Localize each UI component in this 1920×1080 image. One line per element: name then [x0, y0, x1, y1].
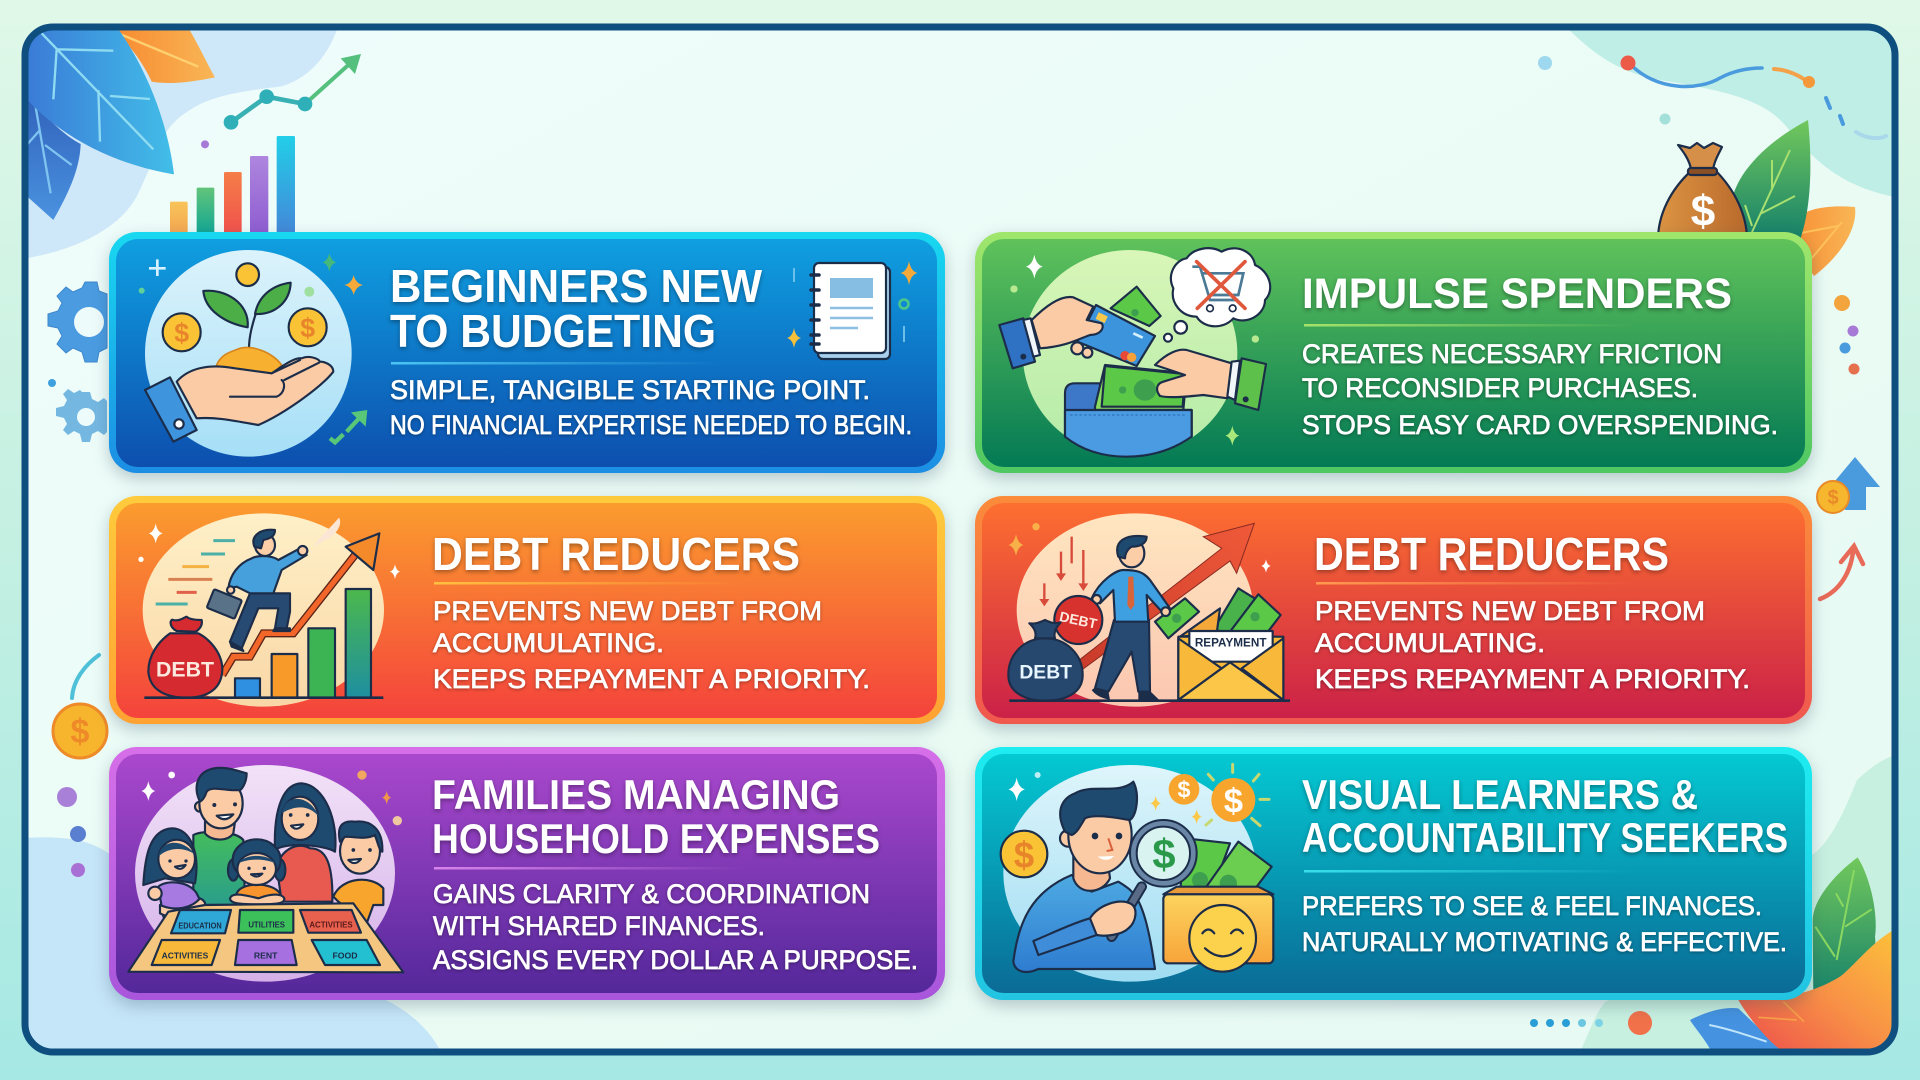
description: STOPS EASY CARD OVERSPENDING.	[1302, 410, 1778, 440]
divider	[434, 582, 744, 584]
heading: FAMILIES MANAGING	[432, 771, 840, 818]
illustration: man with magnifier and money: $	[1152, 830, 1176, 877]
illustration: man with magnifier and money: $	[1014, 834, 1034, 875]
heading	[1302, 771, 1788, 861]
bar chart	[170, 136, 295, 235]
divider	[434, 867, 744, 870]
blob: bottom right	[1580, 755, 1895, 1052]
divider	[1304, 870, 1634, 872]
illustration: family at envelope table: UTILITIES	[248, 920, 285, 930]
dots left	[57, 787, 86, 877]
leaf: multicolour	[1738, 928, 1897, 1052]
leaf: lower blue	[28, 101, 81, 220]
blob: top right	[1566, 27, 1895, 197]
heading: DEBT REDUCERS	[1314, 528, 1669, 580]
panel: visual learners and accountability seekers	[975, 747, 1812, 1000]
illustration: man carrying debt with repayment envelope: DEBT	[1058, 608, 1099, 632]
description: PREVENTS NEW DEBT FROM	[1315, 596, 1705, 626]
heading: DEBT REDUCERS	[432, 528, 800, 580]
panel: families managing household expenses	[109, 747, 945, 1000]
divider	[391, 362, 721, 364]
leaf: green behind bag	[1732, 120, 1810, 240]
divider	[1316, 582, 1636, 584]
panel: debt reducers repayment	[975, 496, 1812, 724]
description	[1315, 596, 1750, 694]
description: KEEPS REPAYMENT A PRIORITY.	[433, 664, 870, 694]
illustration: family at envelope table: EDUCATION	[178, 920, 222, 930]
description	[1302, 339, 1778, 440]
icon: coin left	[53, 704, 107, 758]
illustration: hand with sprout and coins: $	[174, 318, 189, 348]
description: CREATES NECESSARY FRICTION	[1302, 339, 1722, 369]
bottom right leaf cluster	[1690, 857, 1897, 1052]
leaf: orange	[119, 30, 215, 83]
swoosh line top right	[1620, 56, 1886, 138]
illustration: climbing chart over debt bag: DEBT	[156, 658, 214, 682]
sparkles right	[787, 261, 917, 348]
description: TO RECONSIDER PURCHASES.	[1302, 373, 1698, 403]
illustration: man with magnifier and money: $	[1224, 782, 1243, 820]
description: NATURALLY MOTIVATING & EFFECTIVE.	[1302, 927, 1787, 957]
description: WITH SHARED FINANCES.	[433, 911, 765, 941]
description: ACCUMULATING.	[433, 628, 664, 658]
icon: notebook	[811, 263, 890, 359]
card background	[975, 232, 1812, 473]
illustration: family at envelope table: FOOD	[332, 950, 358, 960]
icon: money bag: $	[1691, 187, 1715, 236]
card background	[109, 496, 945, 724]
heading: TO BUDGETING	[390, 305, 716, 357]
heading: HOUSEHOLD EXPENSES	[432, 815, 880, 862]
blob: bottom left	[25, 837, 441, 1052]
icon: money bag	[1658, 143, 1747, 240]
illustration: family at envelope table: ACTIVITIES	[162, 950, 209, 960]
leaf: blue	[1690, 1008, 1779, 1048]
description: ACCUMULATING.	[1315, 628, 1545, 658]
description: KEEPS REPAYMENT A PRIORITY.	[1315, 664, 1750, 694]
description: PREFERS TO SEE & FEEL FINANCES.	[1302, 891, 1762, 921]
card background	[109, 232, 945, 473]
leaf: orange behind bag	[1800, 206, 1856, 276]
description	[433, 596, 870, 694]
top left decoration cluster	[20, 20, 361, 259]
heading: ACCOUNTABILITY SEEKERS	[1302, 814, 1788, 861]
card background	[975, 747, 1812, 1000]
illustration: family at envelope table: RENT	[254, 950, 278, 960]
illustration: hand with sprout and coins: $	[300, 313, 315, 343]
illustration: man carrying debt with repayment envelope	[1008, 513, 1290, 707]
dots right	[1834, 295, 1860, 374]
panel: impulse spenders	[975, 232, 1812, 473]
illustration: climbing chart over debt bag	[138, 513, 400, 707]
line chart arrow	[224, 54, 361, 130]
icon: coin right	[1817, 481, 1849, 513]
panel: debt reducers climbing	[109, 496, 945, 724]
thought bubble: crossed out cart	[1010, 248, 1270, 446]
description	[390, 375, 912, 440]
description: SIMPLE, TANGIBLE STARTING POINT.	[390, 375, 870, 405]
illustration: man carrying debt with repayment envelope: DEBT	[1019, 662, 1072, 683]
heading	[390, 260, 763, 357]
dots bottom	[1530, 1019, 1603, 1027]
heading: BEGINNERS NEW	[390, 260, 763, 312]
description: ASSIGNS EVERY DOLLAR A PURPOSE.	[433, 945, 918, 975]
description: NO FINANCIAL EXPERTISE NEEDED TO BEGIN.	[390, 410, 912, 440]
illustration: wallet, card and hands	[999, 250, 1266, 457]
illustration: family at envelope table: ACTIVITIES	[309, 920, 353, 930]
description	[1302, 891, 1787, 957]
illustration: family at envelope table	[128, 765, 403, 982]
illustration: hand with sprout and coins	[139, 250, 367, 457]
heading: VISUAL LEARNERS &	[1302, 771, 1698, 818]
card background	[109, 747, 945, 1000]
leaf: green	[1813, 857, 1876, 1000]
blob: top left	[20, 20, 340, 259]
blob dot top right	[1538, 56, 1552, 70]
illustration: man with magnifier and money	[1001, 764, 1273, 982]
icon: coin right: $	[1827, 487, 1839, 509]
card background	[975, 496, 1812, 724]
divider	[1304, 324, 1634, 326]
illustration: man carrying debt with repayment envelope: REPAYMENT	[1195, 636, 1267, 650]
icon: coin left: $	[71, 713, 90, 751]
sparkles around sprout	[139, 253, 367, 442]
leaf: blue	[28, 30, 174, 174]
dot near swoosh	[1660, 114, 1670, 124]
description	[433, 879, 918, 975]
icon: gear small	[56, 389, 107, 442]
description: GAINS CLARITY & COORDINATION	[433, 879, 870, 909]
curve above left coin	[72, 655, 99, 698]
purple dot	[201, 140, 209, 148]
description: PREVENTS NEW DEBT FROM	[433, 596, 822, 626]
heading	[432, 771, 880, 862]
arrow up blue	[1836, 457, 1880, 510]
heading: IMPULSE SPENDERS	[1302, 270, 1732, 318]
illustration: man with magnifier and money: $	[1178, 777, 1191, 803]
panel: beginners new to budgeting	[109, 232, 945, 473]
icon: gear large	[48, 282, 107, 362]
dot by gears	[48, 379, 56, 387]
dot orange bottom	[1628, 1011, 1652, 1035]
arrow curved red	[1820, 546, 1863, 599]
